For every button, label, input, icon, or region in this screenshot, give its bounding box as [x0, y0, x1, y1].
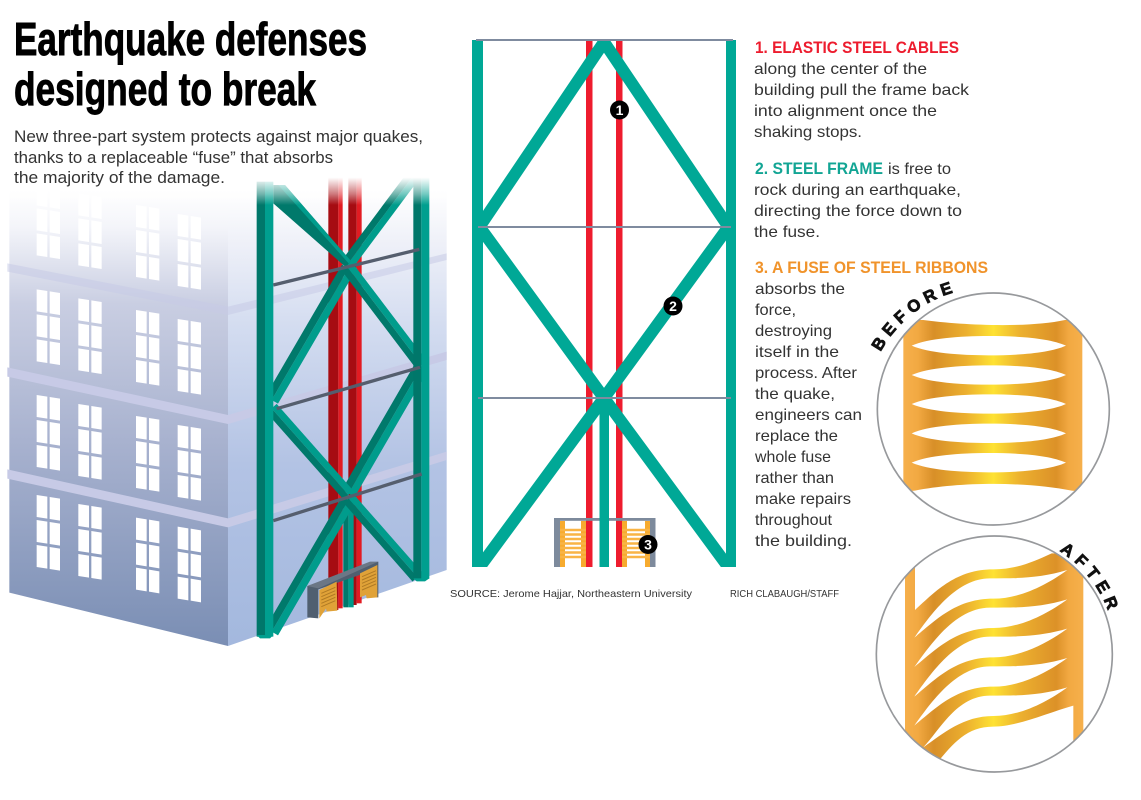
marker 1: 1 [616, 102, 624, 118]
red elastic cables [328, 177, 362, 610]
windows [37, 183, 201, 602]
text block: elastic steel cables: building pull the frame back [754, 82, 970, 99]
text block: fuse of steel ribbons: replace the [755, 428, 838, 445]
before circle [870, 281, 1110, 526]
text block: elastic steel cables: shaking stops. [754, 124, 862, 141]
text block: elastic steel cables: 1. ELASTIC STEEL CABLES [755, 39, 959, 57]
text block: fuse of steel ribbons: throughout [755, 512, 833, 529]
title: designed to break [14, 63, 316, 115]
text block: elastic steel cables [754, 39, 970, 141]
marker 3: 3 [644, 536, 652, 552]
building fuse [307, 562, 378, 618]
subtitle [14, 128, 423, 187]
text block: fuse of steel ribbons: process. After [755, 365, 858, 382]
teal steel frame [257, 170, 429, 638]
title [14, 13, 367, 115]
red cables [586, 40, 622, 567]
marker 2 [664, 296, 682, 316]
building illustration [0, 150, 450, 646]
text block: steel frame [754, 160, 962, 241]
marker 3 [638, 535, 658, 554]
floor bands [7, 253, 447, 527]
text block: elastic steel cables: into alignment once the [754, 103, 937, 120]
marker 1 [610, 100, 629, 120]
gray floor beams [273, 249, 422, 521]
central frame diagram [472, 40, 736, 572]
text block: fuse of steel ribbons: 3. A FUSE OF STEEL RIBBONS [755, 259, 988, 277]
subtitle: thanks to a replaceable “fuse” that absorbs [14, 149, 333, 167]
after ribbons [905, 553, 1083, 763]
subtitle: New three-part system protects against major quakes, [14, 128, 423, 146]
after outline [876, 536, 1112, 772]
text block: fuse of steel ribbons: engineers can [755, 407, 862, 424]
after label: AFTER [1059, 544, 1118, 611]
text block: fuse of steel ribbons [754, 259, 988, 550]
text block: fuse of steel ribbons: destroying [755, 323, 832, 340]
text block: steel frame: rock during an earthquake, [754, 182, 961, 199]
after circle [876, 535, 1118, 773]
before ribbons [903, 320, 1082, 492]
staff credit: RICH CLABAUGH/STAFF [730, 589, 839, 600]
text block: steel frame: directing the force down to [754, 203, 962, 220]
before label: BEFORE [870, 281, 954, 352]
teal frame [472, 40, 736, 572]
title: Earthquake defenses [14, 13, 367, 65]
source credit: SOURCE: Jerome Hajjar, Northeastern University [450, 588, 693, 600]
text block: fuse of steel ribbons: the quake, [755, 386, 835, 403]
text block: fuse of steel ribbons: itself in the [755, 344, 839, 361]
text block: steel frame: the fuse. [754, 224, 820, 241]
building left face [9, 183, 228, 646]
text block: fuse of steel ribbons: force, [755, 302, 796, 319]
text block: fuse of steel ribbons: whole fuse [754, 449, 831, 466]
marker 2: 2 [669, 298, 677, 314]
building right face [228, 183, 447, 646]
text block: steel frame: 2. STEEL FRAME [755, 160, 883, 178]
subtitle: the majority of the damage. [14, 169, 225, 187]
text block: elastic steel cables: along the center of the [754, 61, 927, 78]
text block: fuse of steel ribbons: absorbs the [755, 281, 845, 298]
fuse diagram [554, 518, 656, 567]
before outline [877, 293, 1109, 525]
text block: steel frame: is free to [888, 161, 951, 178]
text block: fuse of steel ribbons: rather than [755, 470, 834, 487]
text block: fuse of steel ribbons: make repairs [755, 491, 851, 508]
gray floor lines [476, 40, 733, 398]
white top fade [0, 150, 450, 205]
text block: fuse of steel ribbons: the building. [755, 533, 852, 550]
